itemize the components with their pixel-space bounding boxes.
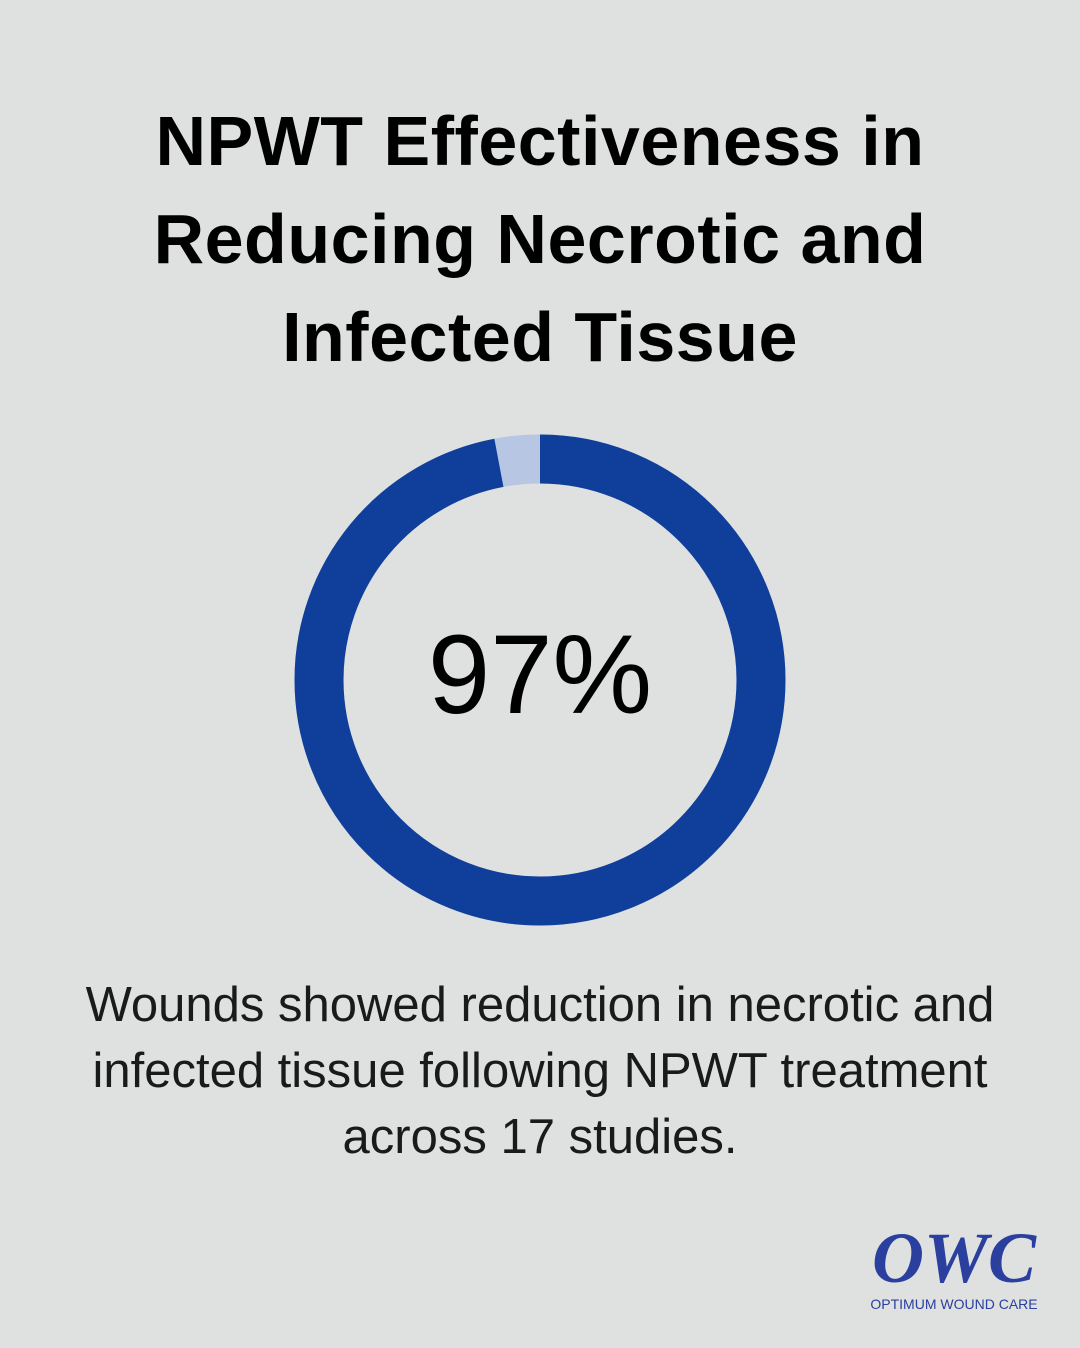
donut chart: 97% [428,612,652,737]
logo: OPTIMUM WOUND CARE [870,1296,1038,1312]
title: Reducing Necrotic and [154,200,926,278]
description text [86,978,994,1164]
description text: infected tissue following NPWT treatment [92,1044,988,1098]
title [154,102,926,376]
title: NPWT Effectiveness in [155,102,924,180]
logo: OWC [872,1218,1036,1298]
description text: Wounds showed reduction in necrotic and [86,978,994,1032]
description text: across 17 studies. [343,1110,737,1164]
title: Infected Tissue [282,298,798,376]
